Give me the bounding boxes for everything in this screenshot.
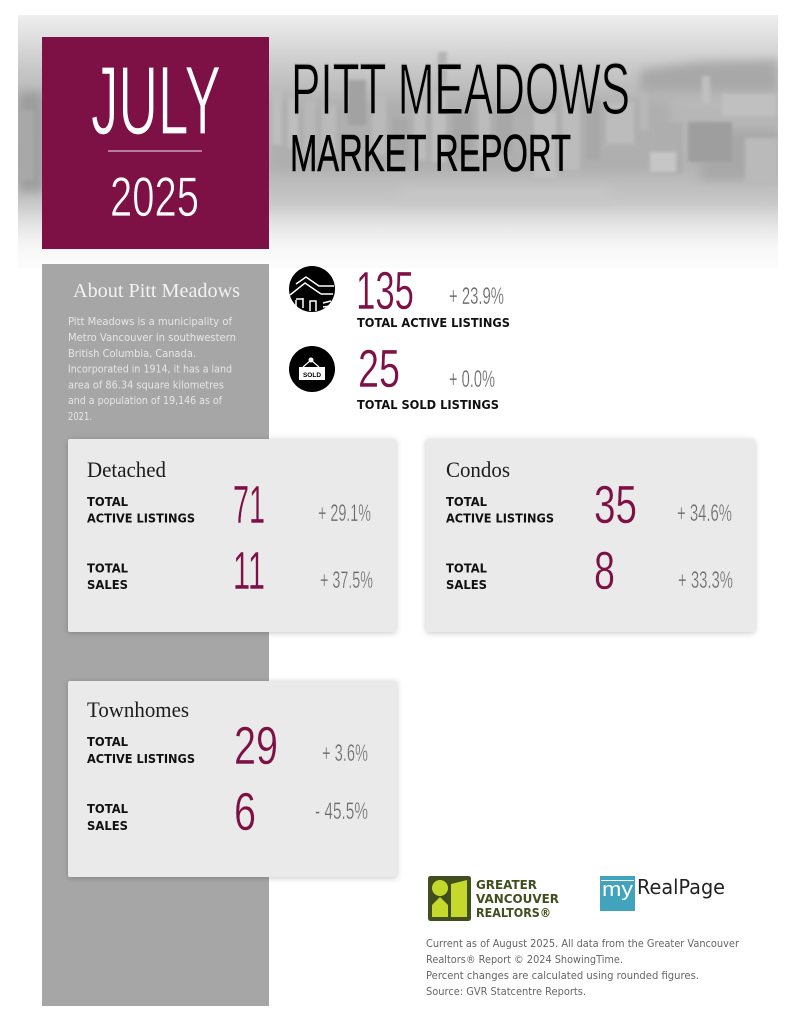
townhomes heading: Townhomes (87, 697, 189, 722)
condos sales label: SALES (446, 578, 487, 592)
condos active label: ACTIVE LISTINGS (446, 512, 554, 526)
logo: Greater Vancouver Realtors: GREATER (476, 877, 537, 892)
townhomes sales value: 6 (234, 782, 256, 842)
townhomes active label: TOTAL (87, 735, 128, 749)
townhomes sales change: - 45.5% (315, 798, 368, 825)
condos active label (446, 495, 554, 526)
about body: and a population of 19,146 as of (68, 395, 222, 407)
about body: 2021. (68, 411, 92, 423)
detached sales label: SALES (87, 578, 128, 592)
detached active label (87, 495, 195, 526)
logo: Greater Vancouver Realtors: REALTORS® (476, 905, 551, 920)
townhomes sales label: TOTAL (87, 802, 128, 816)
about body: British Columbia, Canada. (68, 348, 196, 360)
logo: Greater Vancouver Realtors (428, 876, 559, 921)
about body (68, 316, 236, 423)
month block (42, 37, 269, 249)
townhomes active change: + 3.6% (322, 740, 368, 767)
stat: total sold listings: + 0.0% (449, 366, 495, 393)
footer note: Realtors® Report © 2024 ShowingTime. (426, 954, 623, 966)
detached sales change: + 37.5% (320, 567, 373, 594)
logo: myRealPage: RealPage (637, 875, 725, 899)
icon: house (289, 266, 335, 312)
logo: myRealPage: my (602, 879, 633, 901)
header skyline photo background (18, 15, 778, 268)
detached heading: Detached (87, 457, 166, 482)
condos active change: + 34.6% (677, 500, 732, 527)
stat: total sold listings: 25 (358, 339, 400, 399)
detached sales label (87, 562, 128, 592)
condos sales label (446, 562, 487, 592)
sidebar panel: about (42, 264, 269, 1006)
detached sales label: TOTAL (87, 562, 128, 576)
condos sales label: TOTAL (446, 562, 487, 576)
condos sales value: 8 (594, 541, 615, 601)
townhomes sales label (87, 802, 128, 833)
stat: total active listings (356, 261, 510, 330)
footer note: Current as of August 2025. All data from the Greater Vancouver (426, 938, 740, 950)
about body: Metro Vancouver in southwestern (68, 332, 236, 344)
footer note (426, 938, 740, 998)
footer note: Percent changes are calculated using rounded figures. (426, 970, 699, 982)
stat: total active listings: 135 (356, 261, 414, 321)
condos heading: Condos (446, 457, 510, 482)
month: JULY: JULY (91, 46, 221, 155)
stat: total active listings: + 23.9% (449, 283, 504, 310)
subtitle: Market Report: MARKET REPORT (290, 125, 571, 183)
icon: sold sign: SOLD (303, 372, 321, 379)
townhomes active label: ACTIVE LISTINGS (87, 752, 195, 766)
about heading: About Pitt Meadows (73, 281, 240, 302)
about body: Pitt Meadows is a municipality of (68, 316, 232, 328)
year: 2025: 2025 (110, 165, 199, 228)
condos active value: 35 (594, 475, 637, 535)
detached active value: 71 (233, 475, 265, 535)
detached active change: + 29.1% (318, 500, 371, 527)
about text block (68, 281, 240, 423)
detached active label: ACTIVE LISTINGS (87, 512, 195, 526)
detached active label: TOTAL (87, 495, 128, 509)
condos active label: TOTAL (446, 495, 487, 509)
condos sales change: + 33.3% (678, 567, 733, 594)
townhomes active value: 29 (234, 716, 278, 776)
stat: total active listings: TOTAL ACTIVE LISTINGS (357, 316, 510, 330)
logo: myRealPage (600, 875, 725, 911)
panel: townhomes (68, 681, 397, 877)
stat: total sold listings: TOTAL SOLD LISTINGS (357, 398, 499, 412)
about body: Incorporated in 1914, it has a land (68, 364, 232, 376)
detached sales value: 11 (233, 541, 265, 601)
panel: condos (426, 439, 755, 632)
townhomes active label (87, 735, 195, 766)
divider line (108, 150, 202, 152)
icon: sold sign (289, 346, 335, 392)
stat: total sold listings (357, 339, 499, 412)
panel: detached (68, 439, 396, 632)
about body: area of 86.34 square kilometres (68, 380, 224, 392)
logo: Greater Vancouver Realtors: VANCOUVER (476, 891, 559, 906)
footer note: Source: GVR Statcentre Reports. (426, 986, 586, 998)
townhomes sales label: SALES (87, 819, 128, 833)
